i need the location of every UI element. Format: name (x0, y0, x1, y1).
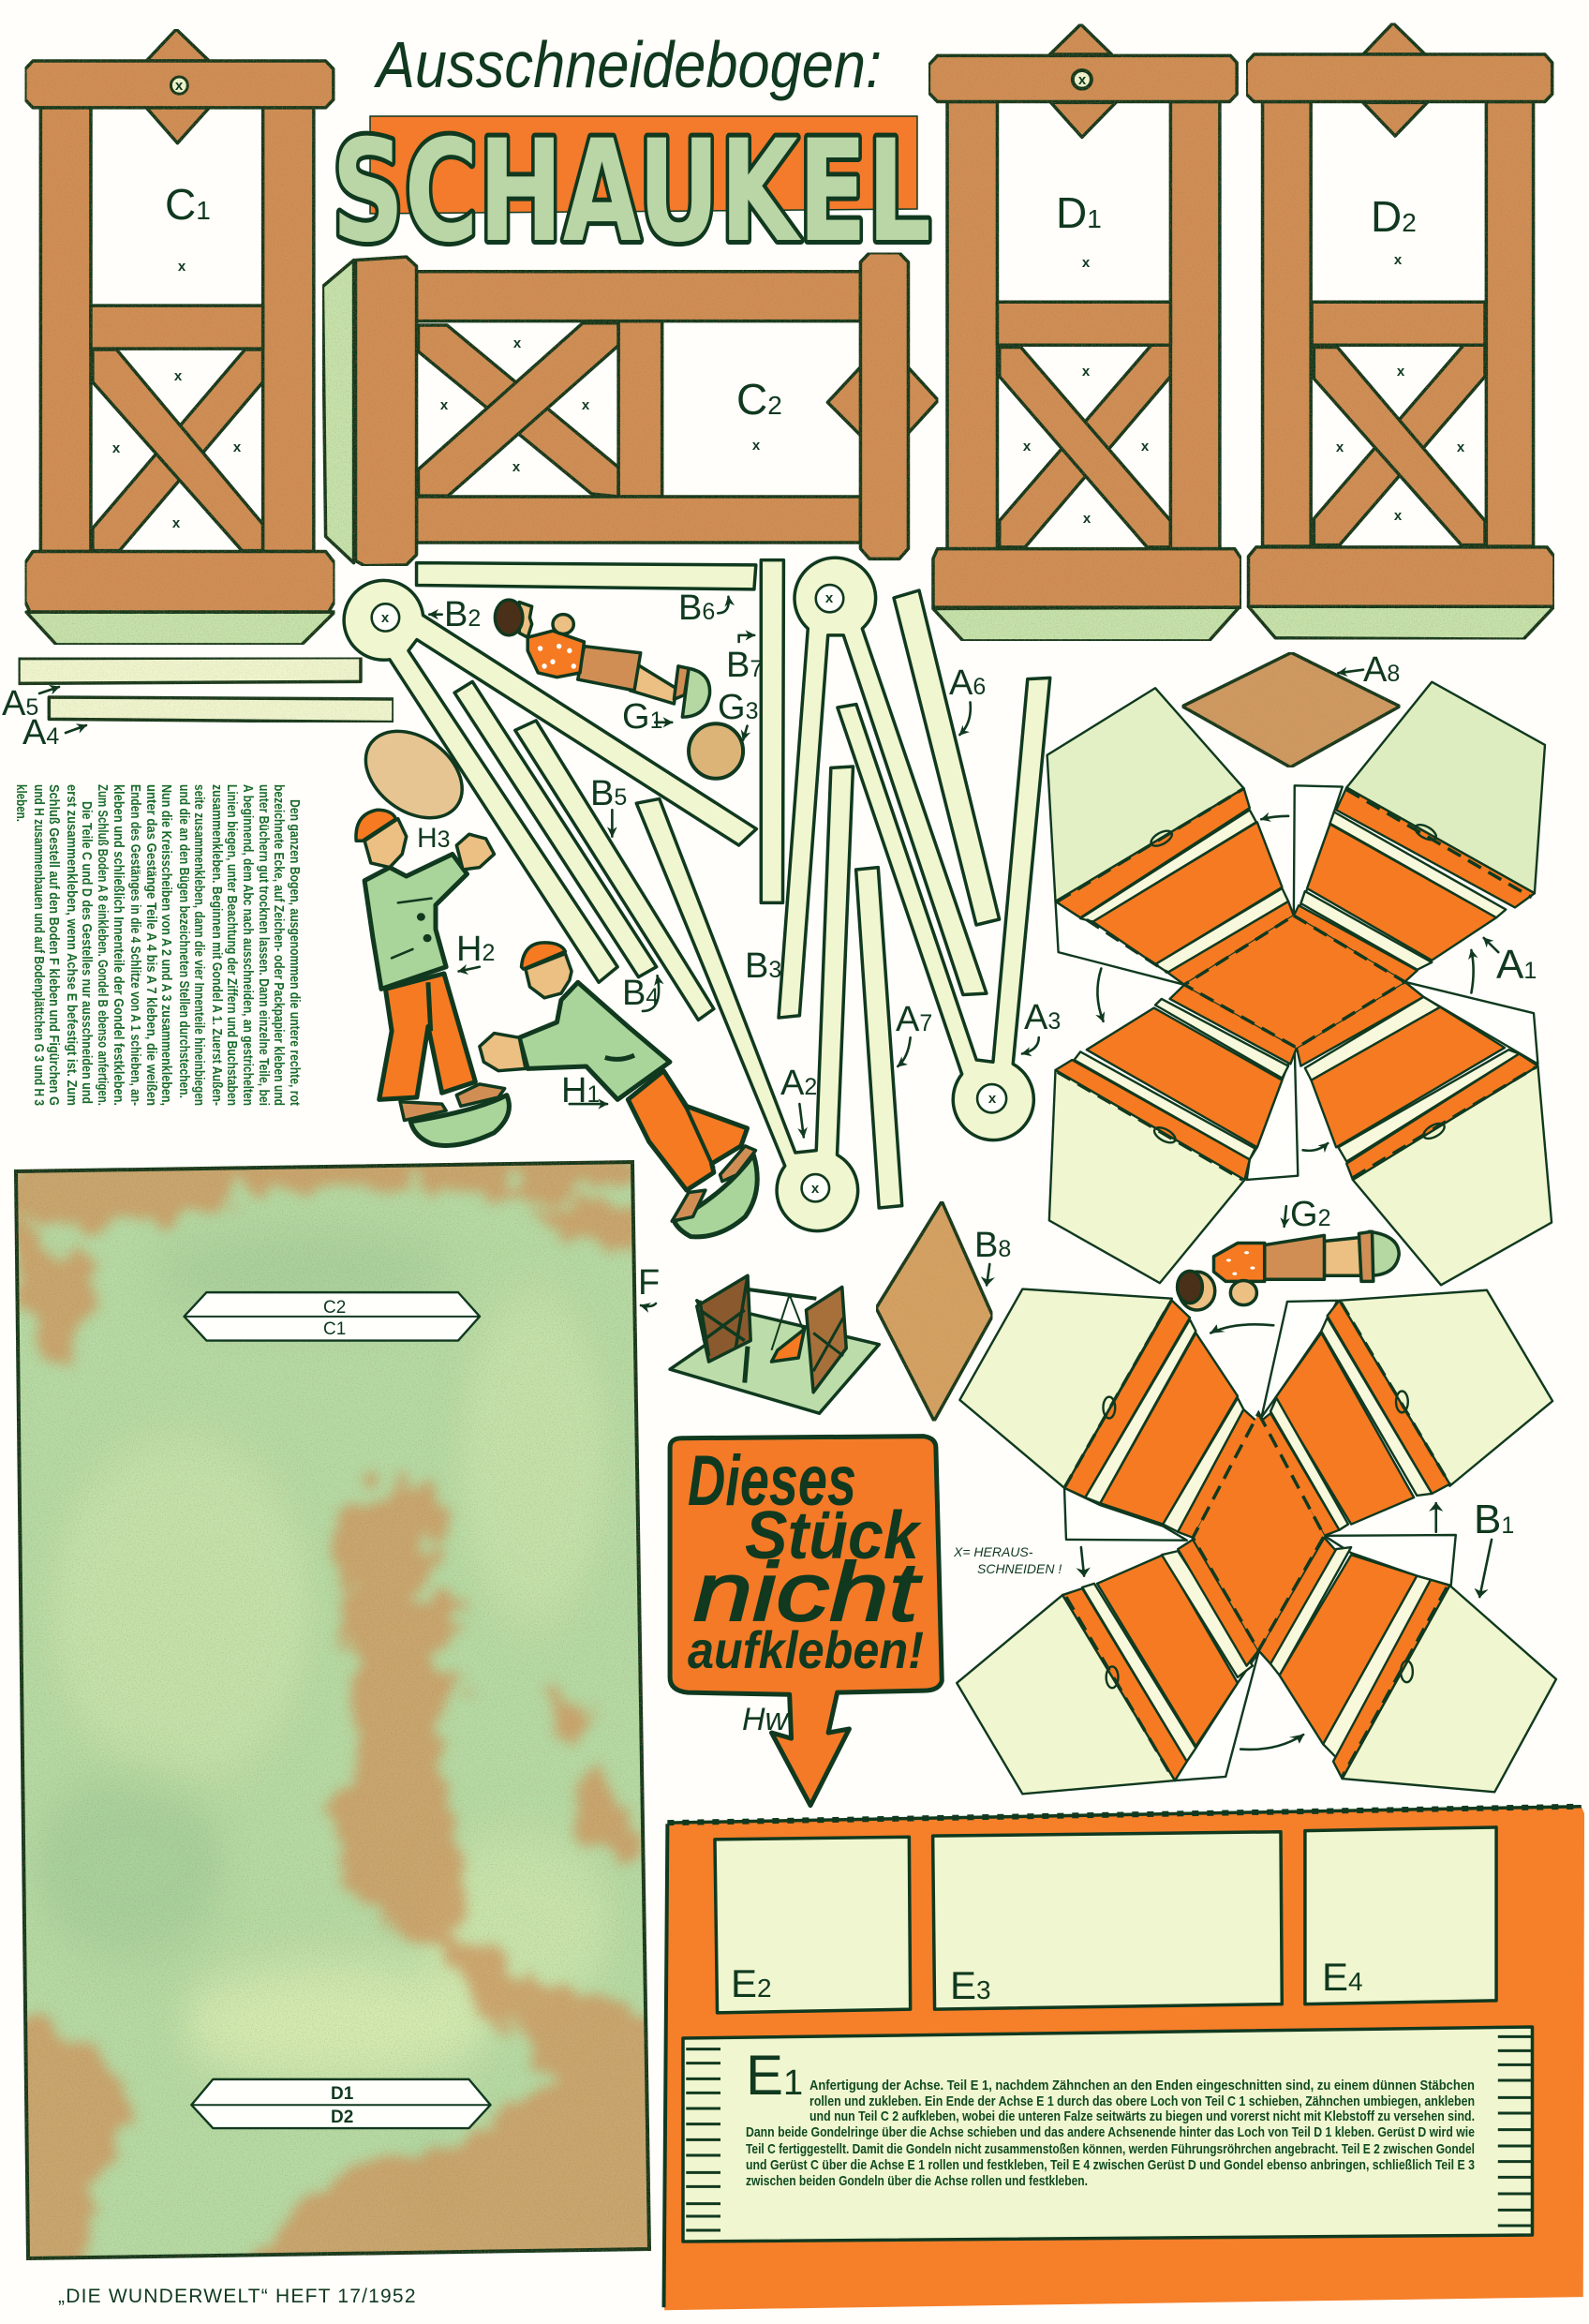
label: A4 (22, 713, 86, 752)
note: x = herausschneiden: X= HERAUS- (953, 1544, 1033, 1559)
part labels: A1 (1496, 942, 1537, 988)
diamond A8 (1182, 652, 1400, 767)
gondola B1 top-right side (1258, 1290, 1552, 1536)
panel: Gestänge parts (hangers and strips) (344, 558, 987, 1231)
heading: SCHAUKEL: SCHAUKEL (332, 111, 931, 274)
gondola B1 top-left side (959, 1289, 1258, 1541)
figure: G1 child (495, 600, 710, 717)
label: D2 (1336, 192, 1465, 524)
panel: instructions (rotated text): unter Büchern gut trocknen lassen. Dann einzelne Teile, bei (256, 784, 272, 1106)
label: C2 (440, 335, 782, 475)
part labels: G1 (622, 697, 662, 737)
label: C2: x (440, 397, 449, 413)
panel: instructions (rotated text): bezeichnete Ecke, auf Zeichen- oder Packpapier kleben und (271, 784, 287, 1106)
hanger B3 (779, 558, 987, 1018)
label: F: F (638, 1263, 660, 1303)
heading ribbon: orange banner (370, 116, 917, 214)
part labels: B5 (590, 774, 627, 813)
E1 tick marks (686, 2036, 1533, 2230)
hub crosses: x (825, 590, 834, 606)
labels E: E3 (950, 1963, 991, 2007)
panel: instructions (rotated text): kleben und schließlich Innenteile der Gondel festkleben. (111, 784, 126, 1106)
panel: instructions (rotated text): zusammenkleben. Beginnen mit Gondel A 1. Zuerst Außen- (209, 784, 225, 1106)
label: D1: D1 (1056, 188, 1102, 237)
hanger A3 (838, 678, 1050, 1140)
label: D2: D2 (1371, 192, 1417, 241)
label: D2: x (1336, 439, 1344, 455)
part labels: A3 (1024, 998, 1061, 1037)
panel: instructions (rotated text): Zum Schluß Boden A 8 einkleben. Gondel B ebenso anfertigen. (95, 784, 111, 1106)
E1 instructions text: Anfertigung der Achse. Teil E 1, nachdem Zähnchen an den Enden eingeschnitten sind, zu einem dünnen Stäbchen (809, 2078, 1475, 2093)
gondola B1 floor (1193, 1413, 1324, 1650)
figure: G3 disc (689, 723, 743, 779)
label: D1: x (1082, 255, 1091, 271)
strip B4 (454, 681, 657, 977)
gondola B1 bottom-left side (957, 1540, 1258, 1794)
gondola A1 floor (1184, 916, 1404, 1048)
label: D1: x (1141, 439, 1150, 454)
figure: H1 man (480, 943, 757, 1237)
hanger A2 (636, 767, 858, 1231)
panel: frame D1 (928, 24, 1241, 641)
part labels: B1 (1474, 1497, 1514, 1542)
label: C2: C2 (736, 375, 782, 424)
note: x = herausschneiden: SCHNEIDEN ! (977, 1561, 1062, 1576)
panel: instructions (rotated text): Linien biegen, unter Beachtung der Ziffern und Buchstaben (224, 784, 240, 1106)
sign text: Dieses (688, 1441, 856, 1521)
hub B3 (816, 585, 843, 612)
gondola A1 top-right side (1294, 682, 1545, 982)
label: C1: x (112, 440, 121, 456)
panel: instructions (rotated text): A beginnend, dem Abc nach ausschneiden, an gestrichelten (240, 784, 256, 1106)
note: x = herausschneiden (953, 1544, 1062, 1576)
panel: instructions (rotated text): Nun die Kreisscheiben von A 2 und A 3 zusammenkleben, (158, 784, 174, 1106)
part labels: H1 (561, 1071, 600, 1110)
hanger B2 (344, 580, 756, 982)
fold arrows A1 (959, 670, 1498, 1227)
label: D2: x (1394, 508, 1403, 524)
panel: ground F (0, 1143, 662, 2287)
label: C1: x (178, 259, 186, 275)
label: D1: x (1082, 364, 1091, 380)
strips A4 and A5 (19, 658, 394, 723)
gondola B1 bottom-right side (1258, 1535, 1556, 1792)
label: C2: x (752, 438, 761, 454)
part E4 (1305, 1827, 1496, 2004)
label: D2: x (1397, 364, 1405, 380)
panel: frame C1 (25, 29, 334, 645)
title: Ausschneidebogen: (373, 28, 882, 101)
label: C1 (112, 78, 242, 531)
sign text: nicht (693, 1545, 923, 1638)
panel: axle sheet E (664, 1807, 1584, 2310)
label: D2: x (1457, 439, 1465, 455)
panel: gondola B1 (670, 1201, 1556, 1806)
strip B5 (515, 721, 714, 1020)
gondola A1 bottom-right side (1297, 982, 1552, 1285)
part E1 (683, 2027, 1533, 2242)
slot: C2 / C1: C1 (323, 1319, 346, 1339)
figures and discs (350, 597, 911, 1237)
sheet background (664, 1807, 1584, 2310)
figure: H3 disc (350, 713, 477, 836)
panel: instructions (rotated text): Die Teile C und D des Gestelles nur ausschneiden und (79, 801, 95, 1104)
strip A6 (894, 590, 1000, 925)
label: A4: A4 (22, 713, 59, 752)
labels E (731, 1955, 1363, 2107)
labels E: E4 (1322, 1955, 1363, 1999)
E1 instructions text (746, 2078, 1475, 2189)
panel: instructions (rotated text): seite zusammenkleben, dann die vier Innenteile hineinbiegen (191, 784, 207, 1106)
label: C1: x (175, 78, 184, 94)
part labels (417, 588, 1537, 1542)
hub crosses: x (381, 610, 390, 626)
footer: „DIE WUNDERWELT“ HEFT 17/1952 (58, 2286, 417, 2307)
wavy top edge (664, 1807, 1582, 2307)
hub A2 (802, 1174, 829, 1201)
part labels: A8 (1363, 650, 1400, 690)
panel: instructions (rotated text): Schluß Gestell auf den Boden F kleben und Figürchen G (46, 784, 62, 1106)
gondola A1 bottom-left side (1049, 985, 1298, 1283)
sign: warning shape (670, 1437, 942, 1806)
slot: D1 / D2: D2 (331, 2108, 353, 2127)
label: A5 (2, 684, 59, 723)
label: D2: x (1394, 252, 1403, 268)
pointer arrows (429, 597, 911, 1137)
labels E: E1 (746, 2044, 803, 2107)
figure: H2 man (356, 810, 509, 1145)
label: C1: C1 (165, 180, 211, 229)
slot: C2 / C1 (185, 1292, 480, 1341)
diamond B8 (876, 1201, 992, 1421)
strip A7 (856, 868, 902, 1208)
E1 instructions text: zwischen beiden Gondeln über die Achse rollen und festkleben. (746, 2173, 1088, 2189)
part labels: B6 (678, 588, 715, 628)
panel: instructions (rotated text): kleben. (13, 784, 29, 822)
part labels: A6 (949, 663, 986, 703)
hub crosses: x (988, 1091, 997, 1107)
sign text: Stück (745, 1498, 923, 1573)
label: C2: x (513, 335, 522, 351)
part labels: B2 (444, 595, 481, 634)
illustration: finished swing (670, 1275, 879, 1413)
panel: instructions (rotated text): und die an den Bügen bezeichneten Stellen durchstechen. (176, 784, 192, 1098)
part labels: B7 (726, 646, 763, 685)
panel: instructions (rotated text) (13, 784, 303, 1106)
hub crosses (381, 590, 997, 1197)
panel: frame C2 (322, 253, 938, 566)
part E3 (933, 1832, 1282, 2009)
figure: G2 child (1178, 1231, 1399, 1310)
part labels: A2 (780, 1064, 817, 1103)
label: C1: x (174, 368, 183, 384)
label: C2: x (512, 459, 521, 475)
strips B6 and B7 (417, 560, 783, 902)
panel: instructions (rotated text): erst zusammenkleben, wenn Achse E befestigt ist. Zum (64, 784, 80, 1106)
slot: C2 / C1: C2 (323, 1298, 346, 1318)
part labels: B4 (622, 974, 659, 1013)
label: D1: x (1078, 72, 1087, 88)
slot: D1 / D2: D1 (331, 2084, 354, 2104)
label: C1: x (233, 439, 242, 455)
sign text (688, 1441, 924, 1679)
sign text: aufkleben! (688, 1620, 924, 1679)
part labels: H3 (417, 823, 451, 854)
labels E: E2 (731, 1961, 772, 2005)
part E2 (715, 1837, 911, 2013)
slot: D1 / D2 (191, 2079, 490, 2128)
hub B2 (372, 603, 399, 632)
fold arrows B1 (987, 1264, 1492, 1750)
gondola A1 top-left side (1047, 688, 1294, 985)
part labels: B8 (974, 1226, 1011, 1265)
label: D1: x (1083, 511, 1092, 527)
panel: frame D2 (1246, 23, 1554, 639)
part labels: H2 (456, 930, 495, 969)
part labels: A7 (896, 1000, 932, 1039)
label: A5: A5 (2, 684, 38, 723)
part labels: G2 (1290, 1195, 1330, 1234)
panel: instructions (rotated text): unter das Gestänge Teile A 4 bis A 7 kleben, die weißen (143, 784, 159, 1106)
panel: instructions (rotated text): Enden des Gestänges in die 4 Schlitze von A 1 schieben, an- (127, 784, 143, 1106)
hub crosses: x (811, 1181, 820, 1197)
label: C1: x (172, 515, 181, 531)
panel: instructions (rotated text): Den ganzen Bogen, ausgenommen die untere rechte, rot (287, 799, 303, 1106)
label: C2: x (582, 397, 590, 413)
signature: Hw (742, 1702, 791, 1737)
panel: gondola A1 (959, 670, 1552, 1285)
part labels: B3 (745, 946, 781, 986)
panel: instructions (rotated text): und H zusammenbauen und auf Bodenplättchen G 3 und H 3 (31, 784, 47, 1106)
label: D1: x (1023, 439, 1032, 454)
part labels: G3 (718, 688, 758, 727)
label: D1 (1023, 72, 1150, 527)
